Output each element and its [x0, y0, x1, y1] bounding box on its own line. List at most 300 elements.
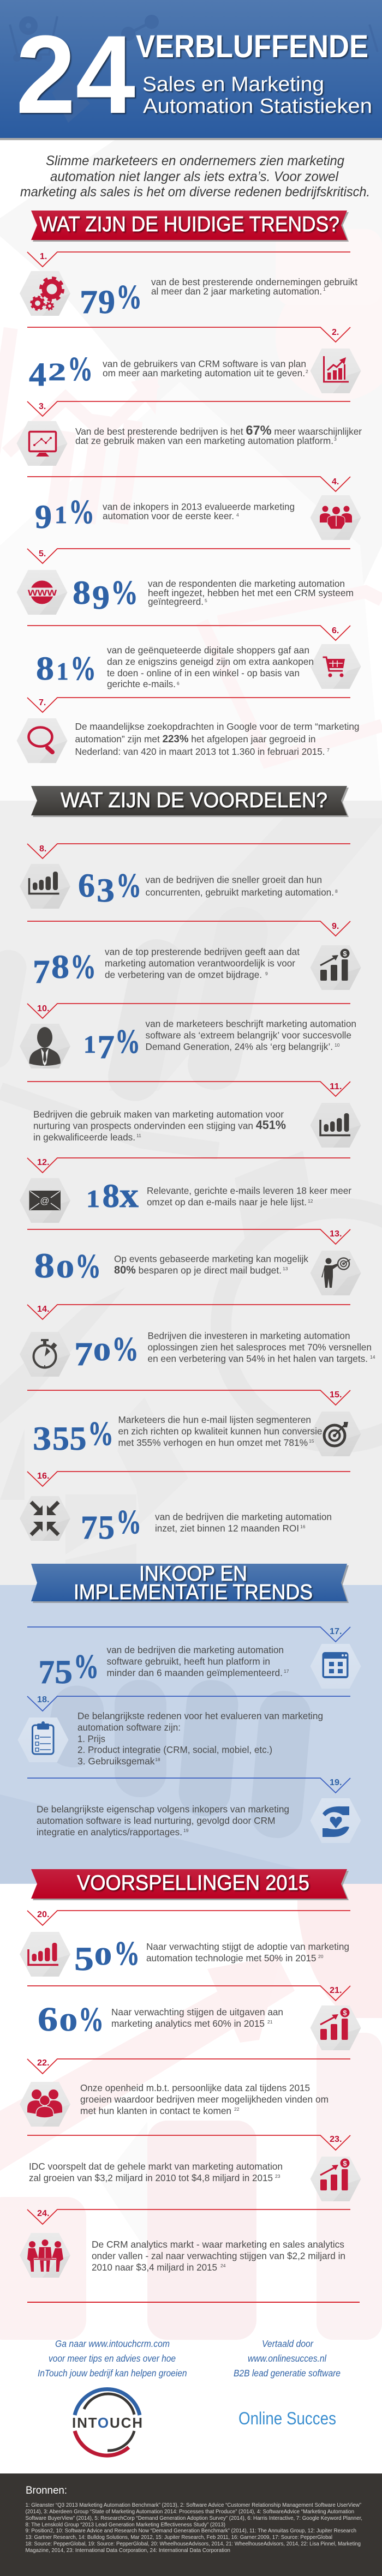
stat text: 2 [306, 369, 308, 374]
stat number: 5 [55, 1654, 73, 1691]
stat text: 15 [309, 1438, 314, 1444]
marker 14: 14. [37, 1305, 49, 1314]
marker 8 [27, 844, 350, 858]
stat number: 5 [52, 1421, 69, 1457]
marker 10: 10. [37, 1004, 49, 1013]
stat number: 0 [94, 1942, 112, 1970]
stat text: Bedrijven die investeren in marketing automation [147, 1330, 350, 1341]
marker 18 [27, 1695, 350, 1711]
stat number: 9 [98, 284, 115, 321]
marker 7 [27, 698, 350, 712]
stat text [118, 1414, 322, 1448]
stat text: Naar verwachting stijgt de adoptie van marketing [146, 1941, 349, 1952]
icon: bar chart red [20, 1932, 70, 1977]
heading banner: voorspellingen: VOORSPELLINGEN 2015 [77, 1871, 309, 1895]
icon: bars with dollar: $ [343, 950, 347, 958]
stat text: Relevante, gerichte e-mails leveren 18 keer meer [147, 1185, 351, 1196]
stat text: van de gebruikers van CRM software is van plan [103, 358, 306, 369]
stat text: om meer aan marketing automation uit te geven. [103, 368, 305, 379]
stat text: 9 [265, 971, 268, 976]
panel: stat 3 [16, 401, 362, 466]
heading banner: voorspellingen [31, 1869, 349, 1900]
stat number: 8 [103, 1178, 120, 1215]
icon: monitor [16, 421, 68, 466]
icon: bars with dollar [310, 945, 361, 990]
footer: bronnen: Bronnen: [26, 2485, 67, 2496]
icon: bars with dollar red: $ [343, 2009, 347, 2017]
stat text: dat ze gebruik maken van een marketing automation platform. [75, 435, 333, 446]
stat text: De maandelijkse zoekopdrachten in Google voor de term “marketing [75, 721, 359, 732]
icon: bars with dollar red: $ [343, 2159, 347, 2167]
stat number: 9 [35, 499, 52, 536]
intro text: automation niet langer als iets extra’s. Voor zowel [50, 169, 339, 184]
panel: stat 12 [20, 1158, 351, 1223]
stat text: 24 [220, 2263, 226, 2268]
icon: gears [20, 271, 70, 316]
icon: bar chart [310, 1103, 361, 1148]
marker 5: 5. [39, 549, 46, 559]
stat text: De belangrijkste eigenschap volgens inkopers van marketing [37, 1804, 289, 1815]
icon: calendar [310, 1644, 361, 1689]
marker 2 [27, 327, 350, 342]
logo: intouch [72, 2389, 142, 2455]
stat text: van de geënqueteerde digitale shoppers gaf aan [107, 645, 309, 656]
heading banner: inkoop en implementatie: IMPLEMENTATIE TRENDS [74, 1581, 313, 1604]
stat text [145, 874, 338, 898]
title: 24 [16, 13, 135, 137]
stat text [151, 277, 357, 297]
call to action: intouch: InTouch jouw bedrijf kan helpen groeien [38, 2368, 187, 2379]
stat text: omzet op dan e-mails naar je hele lijst. [147, 1197, 307, 1208]
source list: 9: Position2, 10: Software Advice and Research Now “Demand Generation Benchmark” (2014), 11: The Annuitas Group, 12: Jupiter Research [25, 2527, 356, 2534]
stat text: en zich richten op kwaliteit kunnen hun conversie [118, 1426, 322, 1437]
stat text: al meer dan 2 jaar marketing automation. [151, 286, 322, 297]
footer: bronnen [0, 2473, 382, 2576]
stat text: 22 [234, 2106, 240, 2112]
panel: stat 9 [27, 921, 361, 990]
stat text: 23 [275, 2173, 280, 2179]
stat text [75, 423, 362, 446]
stat text [29, 2161, 283, 2183]
stat number: % [116, 867, 141, 904]
icon: envelope [20, 1178, 70, 1223]
stat text: nurturing van prospects ondervinden een stijging van 451% [33, 1118, 286, 1132]
stat number: 5 [74, 1941, 94, 1978]
stat text: minder dan 6 maanden geïmplementeerd. [107, 1667, 283, 1678]
stat text: Demand Generation, 24% als ‘erg belangrijk’. [145, 1041, 333, 1052]
stat text: 18 [155, 1757, 160, 1762]
heading banner: inkoop en implementatie [31, 1562, 349, 1604]
stat number: % [116, 1504, 141, 1541]
icon: hands with heart [310, 1798, 361, 1843]
icon: meeting [20, 2233, 70, 2278]
panel: stat 20 [20, 1910, 350, 1978]
marker 14 [27, 1305, 350, 1319]
stat number: 0 [59, 2008, 77, 2036]
stat text: 13 [283, 1266, 288, 1271]
stat text: in gekwalificeerde leads. [33, 1132, 135, 1143]
stat number: 7 [97, 1029, 115, 1066]
call to action: intouch: Ga naar www.intouchcrm.com [55, 2338, 170, 2349]
stat text: met hun klanten in contact te komen [80, 2105, 231, 2116]
stat text [37, 1804, 289, 1838]
stat text: Naar verwachting stijgen de uitgaven aan [111, 2007, 283, 2017]
stat text: groeien waardoor bedrijven meer mogelijkheden vinden om [80, 2094, 329, 2105]
stat text: zal groeien van $3,2 miljard in 2010 tot $4,8 miljard in 2015 [29, 2172, 273, 2183]
stat text [146, 1941, 349, 1963]
stat number: 3 [33, 1421, 51, 1457]
marker 10 [27, 1004, 350, 1018]
source list: 8: The Lenskold Group “2013 Lead Generation Marketing Effectiveness Study” (2013) [25, 2521, 225, 2528]
icon: stopwatch [20, 1332, 70, 1377]
marker 23 [27, 2135, 350, 2150]
source list: Magazine, 2014, 23: International Data Corporation, 24: International Data Corporation [25, 2547, 230, 2554]
stat text: Marketeers die hun e-mail lijsten segmenteren [118, 1414, 311, 1425]
marker 13 [27, 1229, 350, 1244]
stat text [155, 1511, 332, 1534]
stat text: automation” zijn met 223% het afgelopen jaar gegroeid in [75, 734, 315, 745]
icon: bar chart [20, 864, 70, 909]
stat number: 8 [51, 949, 69, 986]
stat number: 7 [81, 1510, 97, 1546]
stat text: dan ze enigszins geneigd zijn om extra aankopen [107, 656, 314, 667]
marker 6 [27, 626, 350, 640]
stat text: 5 [205, 598, 207, 603]
marker 12: 12. [37, 1158, 49, 1167]
stat number: 7 [74, 1336, 93, 1373]
stat text: 17 [284, 1668, 289, 1674]
stat text: marketing automation verantwoordelijk is voor [105, 958, 295, 969]
icon: bars with dollar red [310, 2157, 361, 2201]
stat text [107, 645, 314, 689]
stat text: 14 [370, 1354, 375, 1360]
logo: intouch: INTOUCH [72, 2415, 142, 2431]
stat text: software gebruikt, heeft hun platform in [107, 1656, 270, 1667]
marker 4: 4. [332, 477, 339, 487]
marker 17: 17. [330, 1627, 342, 1636]
stat text: De CRM analytics markt - waar marketing en sales analytics [92, 2239, 344, 2250]
call to action: vertaald door [234, 2338, 341, 2379]
marker 19 [27, 1778, 350, 1793]
icon: envelope: @ [40, 1196, 50, 1206]
marker 11: 11. [330, 1082, 342, 1091]
stat text: oplossingen zien het salesproces met 70% versnellen [147, 1342, 372, 1353]
panel: stat 11 [27, 1082, 361, 1148]
marker 9: 9. [332, 922, 339, 931]
stat number: % [115, 1023, 140, 1060]
stat text: 1. Prijs [77, 1733, 105, 1744]
stat number: 1 [57, 657, 69, 685]
title [16, 13, 372, 137]
intro text: marketing als sales is het om diverse redenen bedrijfskritisch. [20, 184, 370, 200]
marker 1: 1. [40, 252, 47, 261]
stat number: 9 [92, 580, 110, 616]
marker 15: 15. [330, 1390, 342, 1400]
stat text: software als ‘extreem belangrijk’ voor succesvolle [145, 1030, 351, 1041]
stat text [111, 2007, 283, 2029]
marker 20 [27, 1910, 350, 1925]
stat text: 12 [308, 1198, 313, 1204]
icon: magnifier [16, 718, 68, 763]
stat text: 8 [335, 888, 338, 894]
stat text [145, 1018, 356, 1052]
marker 12 [27, 1158, 350, 1173]
stat number: % [114, 1935, 140, 1972]
stat text: 21 [267, 2019, 273, 2025]
stat text: automation technologie met 50% in 2015 [146, 1953, 317, 1963]
stat text [33, 1109, 286, 1143]
header band [0, 0, 382, 140]
panel: stat 22 [20, 2058, 350, 2127]
marker 24 [27, 2209, 350, 2224]
source list: (2014), 3: Aberdeen Group “State of Marketing Automation 2014: Processes that Produce” (2014), 4: SoftwareAdvice “Marketing Automation [25, 2508, 354, 2515]
stat number: % [116, 279, 142, 316]
stat text [105, 946, 300, 980]
stat text [75, 721, 359, 757]
heading banner: voordelen: WAT ZIJN DE VOORDELEN? [61, 789, 327, 812]
stat number: 1 [83, 1030, 96, 1058]
stat number: 0 [93, 1338, 111, 1366]
panel: stat 21 [27, 1986, 361, 2050]
stat text [114, 1253, 308, 1276]
icon: converging arrows [20, 1496, 70, 1541]
stat text [103, 358, 308, 379]
call to action: vertaald door: www.onlinesucces.nl [248, 2353, 327, 2364]
marker 20: 20. [37, 1910, 49, 1919]
stat text [107, 1644, 289, 1678]
marker 7: 7. [39, 698, 46, 707]
header watermark icons [10, 15, 378, 123]
marker 21: 21. [330, 1986, 342, 1995]
stat number: 1 [86, 1185, 100, 1212]
marker 18: 18. [37, 1695, 49, 1704]
marker 5 [27, 549, 350, 563]
marker 21 [27, 1986, 350, 2001]
marker 19: 19. [330, 1778, 342, 1787]
stat text [148, 578, 354, 607]
stat text: 11 [136, 1133, 141, 1138]
marker 16: 16. [37, 1472, 49, 1481]
marker 3: 3. [39, 402, 46, 411]
call to action: vertaald door: Vertaald door [262, 2338, 314, 2349]
stat text: geïntegreerd. [148, 596, 204, 607]
stat number: 7 [80, 284, 98, 321]
stat text [147, 1185, 351, 1208]
stat text [77, 1710, 323, 1767]
stat number: % [88, 1415, 114, 1452]
stat number: 5 [98, 1510, 115, 1546]
panel: stat 16 [20, 1472, 350, 1546]
stat number: 8 [34, 1246, 55, 1286]
stat text: 20 [318, 1954, 324, 1959]
stat text: gerichte e-mails. [107, 678, 176, 689]
stat text: van de marketeers beschrijft marketing automation [145, 1018, 356, 1029]
call to action: vertaald door: B2B lead generatie software [234, 2368, 341, 2379]
panel: stat 13 [27, 1229, 361, 1295]
stat text: inzet, ziet binnen 12 maanden ROI [155, 1523, 299, 1534]
stat text: van de inkopers in 2013 evalueerde marketing [103, 501, 295, 512]
title: Sales en Marketing [142, 73, 324, 96]
stat text: marketing analytics met 60% in 2015 [111, 2018, 265, 2029]
stat text: te doen - online of in een winkel - op basis van [107, 668, 300, 678]
stat text: en een verbetering van 54% in het halen van targets. [147, 1353, 368, 1364]
stat number: % [70, 948, 96, 986]
stat number: 7 [38, 1654, 55, 1691]
stat text: Op events gebaseerde marketing kan mogelijk [114, 1253, 308, 1264]
icon: clipboard [17, 1718, 69, 1762]
panel: stat 18 [17, 1695, 350, 1767]
stat text: met 355% verhogen en hun omzet met 781% [118, 1437, 308, 1448]
stat text: van de bedrijven die marketing automation [107, 1644, 284, 1655]
stat text: IDC voorspelt dat de gehele markt van marketing automation [29, 2161, 283, 2172]
marker 22: 22. [37, 2058, 49, 2068]
icon: man with target [310, 1251, 361, 1295]
heading banner: huidige trends: WAT ZIJN DE HUIDIGE TRENDS? [39, 213, 339, 236]
source list: 1: Gleanster “Q3 2013 Marketing Automation Benchmark” (2013), 2: Software Advice “Customer Relationship Management Software UserView” [25, 2502, 361, 2508]
stat number: 8 [36, 651, 54, 687]
title: Automation Statistieken [143, 95, 372, 118]
icon: shopping cart [310, 644, 361, 689]
stat text [80, 2082, 329, 2116]
panel: stat 17 [27, 1627, 361, 1691]
marker 16 [27, 1472, 350, 1486]
stat text: integratie en analytics/rapportages. [37, 1827, 182, 1838]
stat text: van de best presterende ondernemingen gebruikt [151, 277, 357, 287]
stat number: % [74, 1648, 99, 1685]
marker 13: 13. [330, 1229, 342, 1239]
panel: stat 1 [20, 252, 357, 321]
stat text: automation voor de eerste keer. [103, 511, 234, 521]
marker 3 [27, 401, 350, 416]
stat text: 10 [335, 1042, 340, 1048]
stat number: 6 [78, 868, 95, 904]
stat number: 0 [56, 1255, 74, 1283]
source list: Software BuyerView” (2014), 5: ResearchCorp “Demand Generation Adoption Survey” (2014), 6: Harris Interactive, 7: Google Keyword Planner, [25, 2515, 362, 2521]
intro text [20, 153, 370, 200]
stat text: Van de best presterende bedrijven is het 67% meer waarschijnlijker [75, 423, 362, 438]
panel: stat 24 [20, 2209, 350, 2278]
stat number: % [79, 2001, 104, 2038]
stat text: 2. Product integratie (CRM, social, mobiel, etc.) [77, 1744, 272, 1755]
panel: stat 4 [27, 477, 361, 540]
marker 17 [27, 1627, 350, 1642]
source list: 13: Gartner Research, 14: Bulldog Solutions, Mar 2012, 15: Jupiter Research, Feb 2011, 16: Garner:2009, 17: Source: PepperGlobal [25, 2534, 332, 2541]
logo: online succes: Online Succes [238, 2409, 336, 2428]
icon: three people [310, 495, 361, 540]
stat number: 5 [70, 1421, 86, 1457]
stat number: % [75, 1248, 101, 1285]
panel: stat 19 [27, 1778, 361, 1843]
stat text: 7 [327, 747, 330, 753]
stat text: 4 [236, 512, 239, 518]
panel: stat 14 [20, 1305, 375, 1377]
panel: stat 15 [27, 1390, 361, 1457]
stat text: Bedrijven die gebruik maken van marketing automation voor [33, 1109, 284, 1120]
icon: businessman [20, 1024, 70, 1068]
marker 11 [27, 1082, 350, 1096]
icon: www: www [27, 587, 57, 598]
marker 9 [27, 921, 350, 936]
stat text: de verbetering van de omzet bijdrage. [105, 969, 262, 980]
stat text: automation software zijn: [77, 1722, 181, 1733]
stat text: 6 [177, 681, 180, 686]
stat text [103, 501, 295, 521]
stat text: onder vallen - zal naar verwachting stijgen van $2,2 miljard in [92, 2250, 345, 2261]
stat text: automation software is lead nurturing, gevolgd door CRM [37, 1815, 275, 1826]
panel: stat 2 [27, 327, 361, 393]
stat text: 19 [183, 1828, 189, 1833]
stat text: De belangrijkste redenen voor het evalueren van marketing [77, 1710, 323, 1721]
stat text: Nederland: van 420 in maart 2013 tot 1.360 in februari 2015. [75, 746, 325, 757]
marker 22 [27, 2058, 350, 2074]
stat text [92, 2239, 345, 2273]
stat text: 1 [323, 286, 326, 292]
stat text: van de respondenten die marketing automation [148, 578, 345, 589]
stat number: % [70, 650, 96, 687]
stat text: 3. Gebruiksgemak [77, 1756, 155, 1767]
closing divider [27, 2302, 360, 2303]
icon: rising chart [310, 349, 361, 393]
stat number: x [120, 1175, 139, 1215]
call to action: intouch: voor meer tips en advies over hoe [49, 2353, 176, 2364]
stat number: 3 [97, 873, 115, 909]
marker 23: 23. [330, 2135, 342, 2144]
stat number: % [68, 351, 93, 388]
stat text: 80% besparen op je direct mail budget. [114, 1264, 282, 1276]
marker 2: 2. [332, 328, 339, 337]
panel: stat 23 [27, 2135, 361, 2201]
icon: www [16, 570, 68, 615]
marker 1 [27, 252, 350, 267]
panel: stat 5 [16, 549, 354, 616]
stat text: van de bedrijven die sneller groeit dan hun [145, 874, 322, 885]
stat text [147, 1330, 375, 1364]
stat number: 6 [38, 2001, 58, 2038]
marker 8: 8. [39, 844, 46, 854]
intro text: Slimme marketeers en ondernemers zien marketing [46, 153, 344, 169]
stat number: 8 [73, 575, 91, 611]
marker 4 [27, 477, 350, 491]
stat text: 16 [300, 1524, 306, 1529]
heading banner: voordelen [31, 786, 349, 817]
stat number: 4 [29, 357, 46, 393]
marker 15 [27, 1390, 350, 1405]
stat number: 2 [48, 358, 66, 386]
panel: stat 7 [16, 698, 359, 763]
stat number: % [69, 494, 94, 531]
panel: stat 8 [20, 844, 350, 909]
stat text: van de top presterende bedrijven geeft aan dat [105, 946, 300, 957]
stat text: concurrenten, gebruikt marketing automation. [145, 887, 334, 898]
marker 6: 6. [332, 626, 339, 635]
icon: bars with dollar red [310, 2005, 361, 2050]
icon: group of people [20, 2082, 70, 2127]
stat text: 3 [334, 436, 337, 442]
stat text: heeft ingezet, hebben het met een CRM systeem [148, 587, 354, 598]
stat number: 1 [55, 501, 67, 529]
stat number: 7 [33, 954, 50, 990]
stat text: van de bedrijven die marketing automation [155, 1511, 332, 1522]
call to action: intouch [38, 2338, 187, 2379]
source list [25, 2502, 362, 2554]
stat number: % [112, 1331, 139, 1368]
heading banner: inkoop en implementatie: INKOOP EN [139, 1562, 247, 1586]
icon: target with arrow [310, 1412, 361, 1456]
stat text: 2010 naar $3,4 miljard in 2015 [92, 2262, 217, 2273]
panel: stat 6 [27, 626, 361, 689]
stat number: % [111, 574, 138, 611]
marker 24: 24. [37, 2209, 49, 2218]
